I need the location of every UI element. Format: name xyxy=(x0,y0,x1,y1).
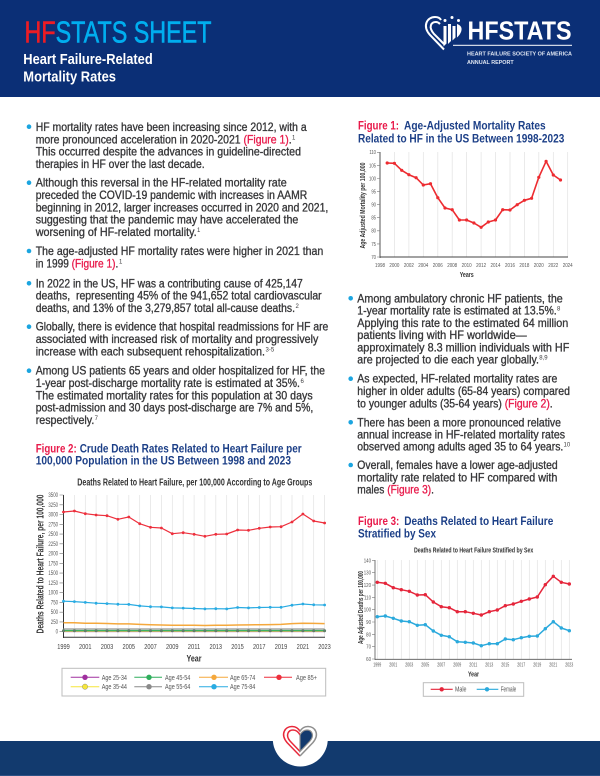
chart: figure 1 age-adjusted mortality xyxy=(358,150,573,279)
chart: figure 1 age-adjusted mortality: 90 xyxy=(371,202,376,209)
logo: HFSTATS: HEART FAILURE SOCIETY OF AMERICA xyxy=(467,52,573,58)
heading: figure 1: Age-Adjusted Mortality Rates xyxy=(404,119,546,132)
chart: figure 2 deaths by age group: 3000 xyxy=(48,512,58,519)
chart: figure 3 deaths by sex: Age Adjusted Deaths per 100,000 xyxy=(358,571,365,644)
icon: footer heart badge xyxy=(273,712,328,766)
chart: figure 2 deaths by age group: 3500 xyxy=(48,492,58,499)
chart: figure 2 deaths by age group: 1000 xyxy=(48,590,58,597)
chart: figure 1 age-adjusted mortality: 2024 xyxy=(563,263,573,269)
chart: figure 2 deaths by age group: 1500 xyxy=(48,571,58,577)
chart: figure 3 deaths by sex: 2005 xyxy=(421,662,429,668)
low age-group lines xyxy=(62,629,326,632)
logo: HFSTATS: HFSTATS xyxy=(468,17,572,45)
legend: figure 3: Female xyxy=(501,687,516,694)
bullet: reversal preceded COVID-19: suggesting that the pandemic may have accelerated the xyxy=(36,213,299,227)
bullet: ambulatory chronic HF: patients living with HF worldwide— xyxy=(357,328,527,342)
chart: figure 2 deaths by age group: 2019 xyxy=(275,642,287,651)
chart: figure 3 deaths by sex: Year xyxy=(468,672,479,679)
legend: figure 2: Age 65-74 xyxy=(230,675,255,682)
chart: figure 3 deaths by sex: 2015 xyxy=(501,662,509,668)
chart: figure 1 age-adjusted mortality: 2020 xyxy=(534,263,544,269)
bullet: age-adjusted rates: The age-adjusted HF mortality rates were higher in 2021 than xyxy=(36,244,323,258)
bullet: 2022 deaths: deaths, and 13% of the 3,279,857 total all-cause deaths. xyxy=(36,301,295,315)
heading: figure 3: Stratified by Sex xyxy=(358,528,436,541)
bullet: reversal preceded COVID-19: beginning in 2012, larger increases occurred in 2020 and 2021, xyxy=(36,200,328,214)
chart: figure 1 age-adjusted mortality: 2022 xyxy=(548,263,558,269)
chart: figure 2 deaths by age group: 2250 xyxy=(48,541,58,548)
heading: figure 1 xyxy=(358,119,565,145)
chart: figure 2 deaths by age group: 2011 xyxy=(188,642,200,651)
logo: HFSTATS: ANNUAL REPORT xyxy=(467,60,514,66)
bullet: ambulatory chronic HF: Among ambulatory chronic HF patients, the xyxy=(357,291,563,305)
bullet: mortality rates increasing: more pronounced acceleration in 2020-2021 (Figure 1). xyxy=(36,132,292,146)
icon: logo heart xyxy=(426,16,462,50)
legend: figure 3 xyxy=(423,683,524,696)
bullet: ambulatory chronic HF: 1-year mortality rate is estimated at 13.5%. xyxy=(357,304,557,318)
legend: figure 2: Age 45-54 xyxy=(165,675,190,682)
bullet: patients 65 and older: Among US patients 65 years and older hospitalized for HF, the xyxy=(36,364,325,378)
legend: figure 2: Age 85+ xyxy=(296,675,317,682)
bullet: age-adjusted rates: 1 xyxy=(119,260,123,266)
line: male xyxy=(376,575,571,617)
chart: figure 2 deaths by age group: 0 xyxy=(56,629,58,636)
chart: figure 2 deaths by age group: 500 xyxy=(51,610,58,616)
bullet: 2022 deaths: 2 xyxy=(296,304,300,310)
bullet: mortality rates increasing: therapies in HF over the last decade. xyxy=(36,157,205,171)
bullet: mortality rates increasing: 1 xyxy=(292,136,296,142)
chart: figure 1 age-adjusted mortality: 2008 xyxy=(447,263,457,269)
chart: figure 1 age-adjusted mortality: 95 xyxy=(371,189,376,196)
chart: figure 1 age-adjusted mortality: 85 xyxy=(371,215,376,222)
chart: figure 2 deaths by age group: 2005 xyxy=(122,642,135,651)
bullet: relative annual increase: annual increase in HF-related mortality rates xyxy=(357,428,565,442)
chart: figure 1 age-adjusted mortality: 2012 xyxy=(476,263,486,269)
chart: figure 3 deaths by sex: 2019 xyxy=(533,662,541,668)
legend: figure 2: Age 75-84 xyxy=(230,684,255,691)
chart: figure 3 deaths by sex: 100 xyxy=(364,607,371,614)
heading: figure 1: Related to HF in the US Between 1998-2023 xyxy=(358,132,565,145)
bullet: relative annual increase: observed among adults aged 35 to 64 years. xyxy=(357,440,563,454)
bullet: 2022 deaths: In 2022 in the US, HF was a contributing cause of 425,147 xyxy=(36,276,303,290)
chart: figure 3 deaths by sex: 2011 xyxy=(469,662,477,668)
bullet: older adults: to younger adults (35-64 years) (Figure 2). xyxy=(357,396,553,410)
chart: figure 1 age-adjusted mortality: 110 xyxy=(369,150,376,156)
bullet: reversal preceded COVID-19: 1 xyxy=(197,228,201,234)
chart: figure 3 deaths by sex: 130 xyxy=(364,570,371,577)
legend: figure 2 xyxy=(62,668,326,696)
footer band xyxy=(0,741,600,776)
chart: figure 1 age-adjusted mortality: 2006 xyxy=(433,263,443,269)
line: mortality rate xyxy=(386,160,562,229)
chart: figure 2 deaths by age group: 3250 xyxy=(48,502,58,509)
bullet: patients 65 and older: 1-year post-discharge mortality rate is estimated at 35%. xyxy=(36,376,300,390)
bullet: ambulatory chronic HF: 8,9 xyxy=(539,356,548,362)
legend: figure 3: Male xyxy=(455,687,467,694)
bullet: mortality rates increasing xyxy=(27,120,307,171)
legend: figure 2: Age 35-44 xyxy=(102,684,127,691)
chart: figure 2 deaths by age group: 250 xyxy=(51,619,58,626)
bullet: females lower rate: mortality rate related to HF compared with xyxy=(357,470,557,484)
bullet: patients 65 and older xyxy=(27,364,325,427)
bullet: reversal preceded COVID-19: worsening of HF-related mortality. xyxy=(35,225,197,239)
heading: figure 2 xyxy=(36,443,302,467)
chart: figure 3 deaths by sex: 2007 xyxy=(437,662,445,668)
bullet: ambulatory chronic HF: 8 xyxy=(557,307,561,313)
chart: figure 3 deaths by sex: 2021 xyxy=(549,662,557,668)
bullet: age-adjusted rates: in 1999 (Figure 1). xyxy=(36,256,118,270)
line: age 75-84 xyxy=(62,600,326,610)
bullet: age-adjusted rates xyxy=(27,244,323,270)
chart: figure 1 age-adjusted mortality: 2000 xyxy=(389,263,399,269)
chart: figure 1 age-adjusted mortality: 80 xyxy=(371,228,376,235)
bullet: reversal preceded COVID-19: preceded the COVID-19 pandemic with increases in AAMR xyxy=(36,188,307,202)
bullet: reversal preceded COVID-19 xyxy=(27,176,328,239)
bullet: relative annual increase: 10 xyxy=(564,443,571,449)
chart: figure 3 deaths by sex: 2009 xyxy=(453,662,461,668)
chart: figure 1 age-adjusted mortality: 2010 xyxy=(462,263,472,269)
bullet: relative annual increase xyxy=(348,415,571,454)
bullet: older adults: higher in older adults (65-84 years) compared xyxy=(357,384,570,398)
bullet: patients 65 and older: respectively. xyxy=(36,413,94,427)
bullet: ambulatory chronic HF: approximately 8.3 million individuals with HF xyxy=(357,340,569,354)
chart: figure 3 deaths by sex: 2003 xyxy=(405,662,413,668)
chart: figure 3 deaths by sex: 2023 xyxy=(565,662,573,668)
bullet: readmissions: 3-5 xyxy=(266,348,275,354)
chart: figure 2 deaths by age group: 1250 xyxy=(48,580,58,587)
chart: figure 1 age-adjusted mortality: 2014 xyxy=(490,263,501,269)
chart: figure 3 deaths by sex: 80 xyxy=(366,632,371,639)
bullet: females lower rate xyxy=(348,458,558,496)
bullet: ambulatory chronic HF: are projected to die each year globally. xyxy=(357,353,539,367)
chart: figure 3 deaths by sex: 1999 xyxy=(373,662,381,668)
bullet: mortality rates increasing: HF mortality rates have been increasing since 2012, with a xyxy=(36,120,307,134)
chart: figure 3 deaths by sex: 70 xyxy=(366,644,371,651)
chart: figure 2 deaths by age group: 2023 xyxy=(318,642,331,651)
chart: figure 2 deaths by age group xyxy=(36,478,331,664)
chart: figure 1 age-adjusted mortality: 2002 xyxy=(404,263,414,269)
bullet: older adults xyxy=(348,372,570,410)
bullet: females lower rate: Overall, females have a lower age-adjusted xyxy=(357,458,558,472)
bullet: mortality rates increasing: This occurred despite the advances in guideline-directed xyxy=(36,145,301,159)
bullet: females lower rate: males (Figure 3). xyxy=(357,482,434,496)
bullet: ambulatory chronic HF: Applying this rate to the estimated 64 million xyxy=(357,316,568,330)
legend: figure 2: Age 55-64 xyxy=(165,684,190,691)
chart: figure 2 deaths by age group: 1999 xyxy=(57,642,70,651)
bullet: relative annual increase: There has been a more pronounced relative xyxy=(357,415,561,429)
bullet: patients 65 and older: The estimated mortality rates for this population at 30 days xyxy=(36,388,313,402)
legend: figure 2: Age 25-34 xyxy=(102,675,127,682)
chart: figure 1 age-adjusted mortality: 2004 xyxy=(418,263,429,269)
bullet: older adults: As expected, HF-related mortality rates are xyxy=(357,372,558,386)
line: female xyxy=(376,614,571,647)
heading: figure 1: Figure 1: xyxy=(358,119,399,132)
bullet: readmissions: associated with increased risk of mortality and progressively xyxy=(36,332,318,346)
chart: figure 2 deaths by age group: 2000 xyxy=(48,551,58,558)
bullet: patients 65 and older: 6 xyxy=(300,379,304,385)
bullet: ambulatory chronic HF xyxy=(348,291,569,367)
chart: figure 1 age-adjusted mortality: 105 xyxy=(369,163,376,170)
bullet: 2022 deaths xyxy=(27,276,322,315)
chart: figure 3 deaths by sex: 60 xyxy=(366,656,371,663)
chart: figure 3 deaths by sex: 120 xyxy=(364,582,371,589)
bullet: readmissions: Globally, there is evidence that hospital readmissions for HF are xyxy=(36,320,329,334)
chart: figure 2 deaths by age group: 2003 xyxy=(101,642,113,651)
chart: figure 1 age-adjusted mortality: Years xyxy=(460,272,474,279)
heading: figure 3: Figure 3: xyxy=(358,515,399,528)
title: HFSTATS SHEET xyxy=(24,14,212,49)
chart: figure 2 deaths by age group: 2009 xyxy=(166,642,178,651)
logo: HFSTATS xyxy=(426,16,573,66)
chart: figure 1 age-adjusted mortality: 2016 xyxy=(505,263,515,269)
chart: figure 2 deaths by age group: 2015 xyxy=(231,642,244,651)
chart: figure 1 age-adjusted mortality: 70 xyxy=(371,254,376,261)
chart: figure 1 age-adjusted mortality: 1998 xyxy=(375,263,385,269)
heading: figure 3 xyxy=(358,515,554,541)
chart: figure 2 deaths by age group: Deaths Related to Heart Failure, per 100,000 xyxy=(36,494,46,634)
chart: figure 3 deaths by sex xyxy=(358,548,573,679)
chart: figure 2 deaths by age group: 2013 xyxy=(210,642,222,651)
subtitle xyxy=(23,51,153,86)
heading: figure 2: Figure 2: xyxy=(36,443,77,456)
bullet: 2022 deaths: deaths, representing 45% of the 941,652 total cardiovascular xyxy=(36,288,322,302)
chart: figure 2 deaths by age group: 2500 xyxy=(48,532,58,538)
chart: figure 3 deaths by sex: 140 xyxy=(364,558,371,565)
chart: figure 2 deaths by age group: 750 xyxy=(51,600,58,607)
bullet: readmissions xyxy=(27,320,329,358)
chart: figure 2 deaths by age group: 2001 xyxy=(79,642,92,651)
chart: figure 2 deaths by age group: 1750 xyxy=(48,561,58,568)
chart: figure 3 deaths by sex: 2013 xyxy=(485,662,493,668)
chart: figure 1 age-adjusted mortality: 100 xyxy=(369,176,376,183)
subtitle: Heart Failure-Related xyxy=(23,51,153,68)
line: age 85+ xyxy=(62,510,326,538)
bullet: patients 65 and older: 7 xyxy=(95,416,99,422)
chart: figure 2 deaths by age group: 2017 xyxy=(253,642,266,651)
chart: figure 2 deaths by age group: 2021 xyxy=(297,642,309,651)
chart: figure 3 deaths by sex: 2001 xyxy=(389,662,397,668)
bullet: readmissions: increase with each subsequent rehospitalization. xyxy=(36,344,265,358)
heading: figure 2: 100,000 Population in the US Between 1998 and 2023 xyxy=(36,454,291,467)
chart: figure 1 age-adjusted mortality: 2018 xyxy=(519,263,529,269)
chart: figure 1 age-adjusted mortality: Age Adjusted Mortality per 100,000 xyxy=(358,162,367,248)
bullet: reversal preceded COVID-19: Although this reversal in the HF-related mortality rate xyxy=(36,176,287,190)
line: age 65-74 xyxy=(64,623,325,626)
chart: figure 3 deaths by sex: Deaths Related to Heart Failure Stratified by Sex xyxy=(414,548,533,555)
chart: figure 3 deaths by sex: 110 xyxy=(364,595,371,602)
chart: figure 2 deaths by age group: 2750 xyxy=(48,522,58,529)
chart: figure 3 deaths by sex: 90 xyxy=(366,619,371,626)
heading: figure 2: Crude Death Rates Related to Heart Failure per xyxy=(80,443,302,456)
header band xyxy=(0,0,600,97)
heading: figure 3: Deaths Related to Heart Failure xyxy=(404,515,554,528)
chart: figure 1 age-adjusted mortality: 75 xyxy=(371,241,376,248)
chart: figure 2 deaths by age group: 2007 xyxy=(144,642,157,651)
chart: figure 2 deaths by age group: Year xyxy=(186,653,202,664)
chart: figure 2 deaths by age group: Deaths Related to Heart Failure, per 100,000 According to Age Groups xyxy=(77,478,313,489)
subtitle: Mortality Rates xyxy=(23,69,116,86)
bullet: patients 65 and older: post-admission and 30 days post-discharge are 7% and 5%, xyxy=(36,401,313,415)
chart: figure 3 deaths by sex: 2017 xyxy=(517,662,525,668)
